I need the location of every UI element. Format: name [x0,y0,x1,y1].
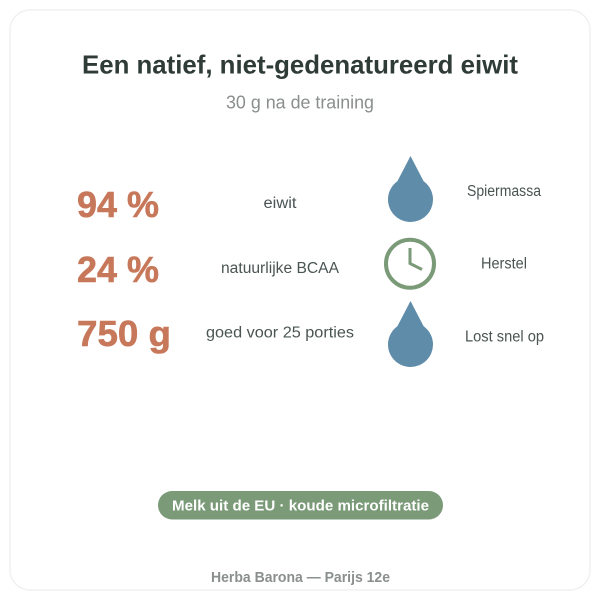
subtitle: 30 g na de training [226,92,374,112]
icon: clock herstel [386,240,434,288]
badge [158,491,443,520]
title: Een natief, niet-gedenatureerd eiwit [82,50,518,80]
label: Herstel: Herstel [481,256,527,272]
stat: 94 %: 94 % [77,184,159,225]
footer: Herba Barona — Parijs 12e [211,569,390,586]
stat: 750 g: 750 g [77,313,171,354]
stat: 24 %: 24 % [77,249,159,290]
label: Spiermassa: Spiermassa [467,183,541,200]
label: Lost snel op: Lost snel op [465,328,544,346]
label: goed voor 25 porties: goed voor 25 porties [206,324,354,342]
icon: drop spiermassa [388,156,433,222]
badge: Melk uit de EU · koude microfiltratie [172,498,429,514]
label: natuurlijke BCAA: natuurlijke BCAA [221,260,340,277]
icon: drop lost snel op [388,301,433,367]
label: eiwit: eiwit [264,195,297,212]
